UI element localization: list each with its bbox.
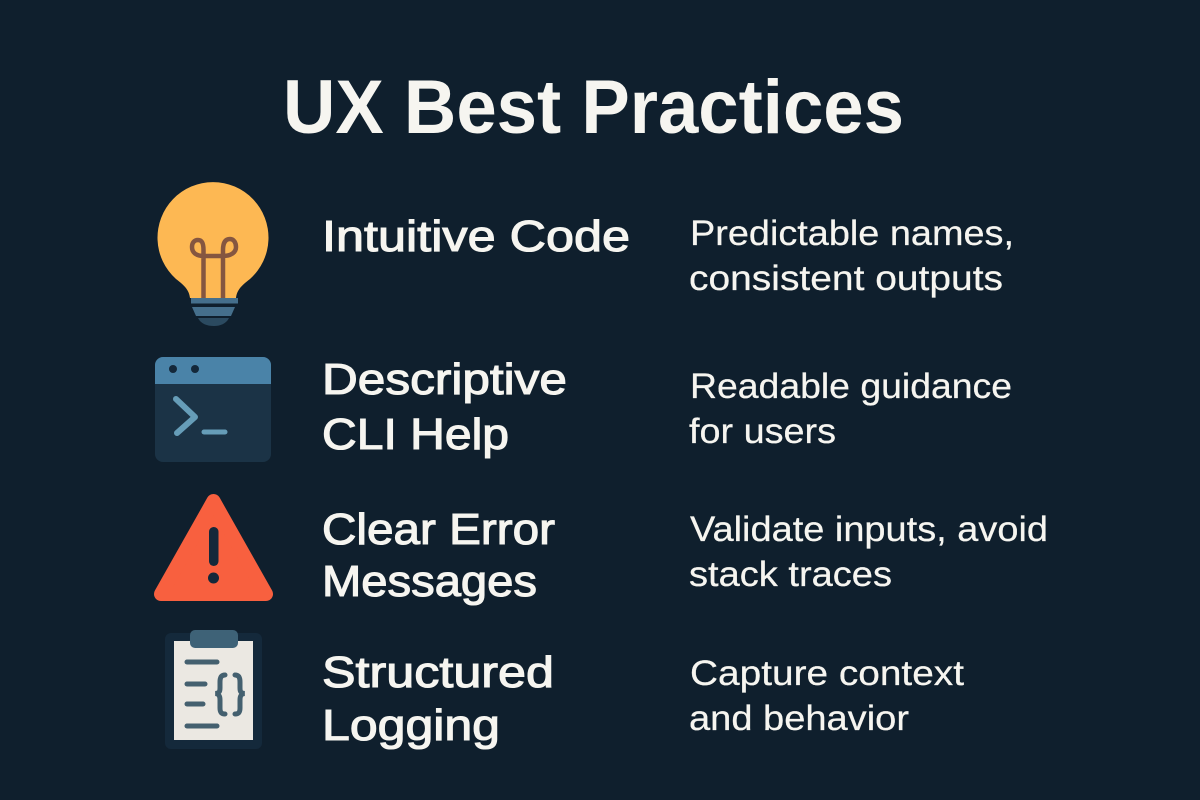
heading: structured logging xyxy=(322,649,554,750)
heading: descriptive cli help: Descriptive xyxy=(322,356,567,404)
description: structured logging: and behavior xyxy=(689,699,909,738)
heading: structured logging: Structured xyxy=(322,649,554,697)
icon: warning triangle xyxy=(161,501,266,594)
panel: descriptive cli help xyxy=(155,356,1012,462)
description: clear error messages: Validate inputs, avoid xyxy=(690,510,1048,549)
description: intuitive code: Predictable names, xyxy=(690,214,1014,253)
description: clear error messages xyxy=(689,510,1048,594)
heading: clear error messages: Messages xyxy=(322,558,537,606)
description: structured logging xyxy=(689,654,964,738)
heading: structured logging: Logging xyxy=(322,702,500,750)
description: descriptive cli help: for users xyxy=(689,412,836,451)
description: clear error messages: stack traces xyxy=(689,555,892,594)
description: structured logging: Capture context xyxy=(690,654,964,693)
description: descriptive cli help: Readable guidance xyxy=(690,367,1012,406)
description: descriptive cli help xyxy=(689,367,1012,451)
panel: intuitive code xyxy=(158,182,1014,326)
description: intuitive code: consistent outputs xyxy=(689,259,1003,298)
heading: descriptive cli help: CLI Help xyxy=(322,411,509,459)
heading: clear error messages xyxy=(322,506,555,606)
description: intuitive code xyxy=(689,214,1014,298)
icon: clipboard with code xyxy=(165,630,262,749)
heading: descriptive cli help xyxy=(322,356,567,459)
icon: terminal window xyxy=(155,357,271,462)
icon: light bulb xyxy=(158,182,268,326)
panel: clear error messages xyxy=(161,501,1048,606)
panel: structured logging xyxy=(165,630,964,750)
title: UX Best Practices xyxy=(283,65,904,150)
heading: clear error messages: Clear Error xyxy=(322,506,555,554)
heading: intuitive code: Intuitive Code xyxy=(322,213,630,261)
